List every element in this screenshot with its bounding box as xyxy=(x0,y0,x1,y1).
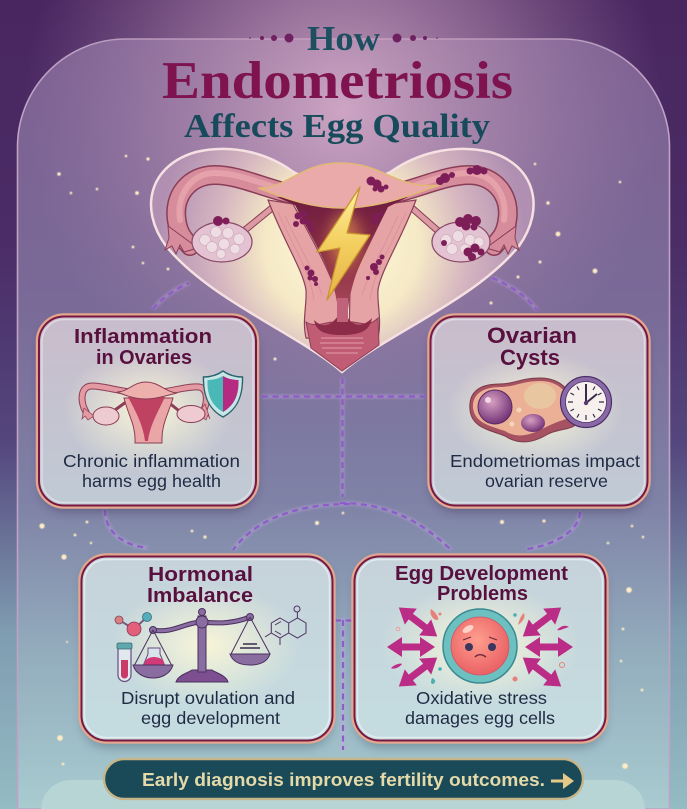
uterine walls xyxy=(268,200,338,340)
banner text: Early diagnosis improves fertility outcomes. xyxy=(142,770,545,790)
icon: ovary with cysts xyxy=(470,378,577,442)
dashed connectors xyxy=(105,278,580,750)
description xyxy=(450,451,640,491)
cervix xyxy=(306,298,379,371)
cavity xyxy=(277,197,408,310)
icon: shield xyxy=(203,371,243,417)
warm glow behind bolt xyxy=(329,212,361,268)
wall muscle lines xyxy=(278,212,406,300)
description: harms egg health xyxy=(82,471,221,491)
top glow xyxy=(0,0,687,430)
icon: balance scale xyxy=(133,608,270,682)
banner xyxy=(104,759,583,799)
lightning bolt xyxy=(317,187,370,300)
bottom pale panel xyxy=(41,780,645,809)
left tube xyxy=(176,173,300,246)
icon: uterus xyxy=(82,382,210,443)
icon: sad egg cell xyxy=(443,609,517,683)
heading: Cysts xyxy=(500,345,560,370)
sparkles xyxy=(39,155,644,769)
description: damages egg cells xyxy=(405,708,555,728)
heading: Hormonal xyxy=(148,564,253,586)
ligaments xyxy=(245,208,437,230)
description xyxy=(121,688,295,728)
fundus xyxy=(258,163,440,208)
title: How: How xyxy=(307,19,381,58)
heading xyxy=(487,323,577,370)
heading: in Ovaries xyxy=(96,347,192,369)
icon: stress arrows xyxy=(387,600,573,694)
fimbriae xyxy=(165,226,519,254)
heading xyxy=(74,326,212,369)
description xyxy=(63,451,240,491)
heading: Imbalance xyxy=(147,585,253,607)
heading: Ovarian xyxy=(487,323,577,348)
heading: Problems xyxy=(437,583,528,605)
icon: molecule xyxy=(115,612,152,636)
ovaries xyxy=(192,222,490,262)
heading: Egg Development xyxy=(395,563,568,585)
icon: droplets xyxy=(391,609,569,684)
title xyxy=(162,19,513,145)
heading: Inflammation xyxy=(74,326,212,348)
description: Endometriomas impact xyxy=(450,451,640,471)
arrow xyxy=(551,773,574,789)
heading xyxy=(147,564,253,607)
icon: test tube xyxy=(117,643,132,682)
icon: clock xyxy=(560,376,612,428)
icon: hormone structure xyxy=(265,606,306,645)
uterus illustration xyxy=(165,163,519,371)
panel: egg development problems xyxy=(352,554,608,748)
description: ovarian reserve xyxy=(485,471,608,491)
heading xyxy=(395,563,568,605)
description: Chronic inflammation xyxy=(63,451,240,471)
panel: inflammation in ovaries xyxy=(37,314,258,512)
panel: hormonal imbalance xyxy=(80,554,334,748)
description: Disrupt ovulation and xyxy=(121,688,295,708)
description xyxy=(405,688,555,728)
title: Endometriosis: Endometriosis xyxy=(162,52,513,110)
lesions xyxy=(213,165,488,286)
title ornaments xyxy=(249,34,438,42)
right tube xyxy=(384,173,508,246)
panel: ovarian cysts xyxy=(428,314,650,512)
heart outline with glow xyxy=(151,149,534,372)
description: egg development xyxy=(141,708,280,728)
title: Affects Egg Quality: Affects Egg Quality xyxy=(184,108,490,145)
description: Oxidative stress xyxy=(416,688,547,708)
